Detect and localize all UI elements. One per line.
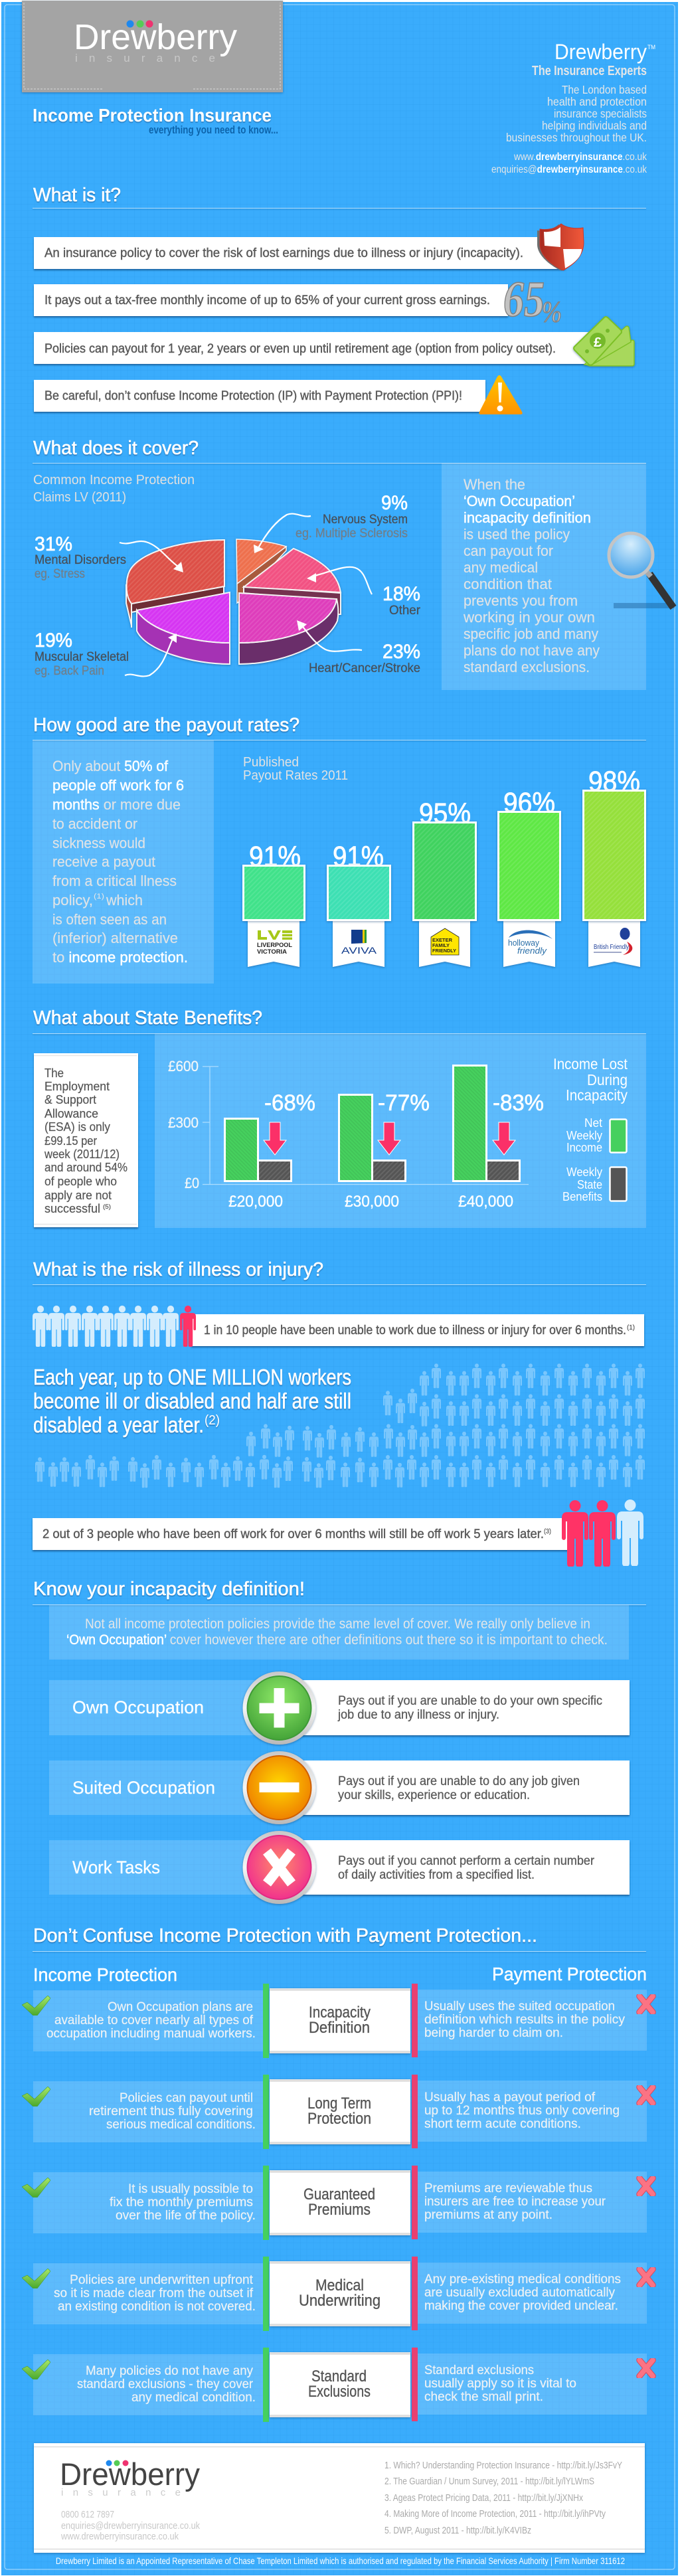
panel: own occupation note: standard exclusions. bbox=[464, 659, 590, 675]
subtitle: everything you need to know... bbox=[149, 124, 278, 136]
comparison row: medical underwriting: so it is made clear from the outset if bbox=[54, 2286, 254, 2300]
bar: Liverpool Victoria 91% bbox=[243, 841, 304, 967]
pie label: 9%: 9% bbox=[381, 492, 408, 514]
panel: own occupation note: prevents you from bbox=[464, 592, 578, 609]
bars: £20,000: £20,000 bbox=[228, 1193, 283, 1211]
logo: Holloway: holloway bbox=[508, 938, 539, 948]
slice: other 18% bbox=[244, 549, 341, 614]
pie label: 19%: Muscular Skeletal bbox=[35, 650, 129, 664]
legend: During bbox=[587, 1071, 628, 1088]
heading: state benefits: What about State Benefits? bbox=[33, 1007, 262, 1029]
icon: cross bbox=[639, 2178, 653, 2194]
footer contact details: www.drewberryinsurance.co.uk bbox=[60, 2531, 179, 2542]
fact bar 2: It pays out a tax-free monthly income of up to 65% of your current gross earnings. bbox=[44, 294, 490, 307]
fact bar: 2 out of 3 bbox=[33, 1518, 570, 1550]
pictogram: 1 in 10 people bbox=[33, 1306, 196, 1347]
bars: £30,000 bbox=[339, 1094, 405, 1211]
footer references: 1. Which? Understanding Protection Insurance - http://bit.ly/Js3FvY bbox=[384, 2460, 622, 2471]
panel: payout text: policy, bbox=[52, 892, 93, 908]
card: ESA note: & Support bbox=[44, 1093, 96, 1106]
definition: work tasks: of daily activities from a specified list. bbox=[338, 1868, 535, 1882]
panel: payout text: people off work for 6 bbox=[52, 777, 184, 794]
icon: cross bbox=[639, 2087, 653, 2103]
panel: own occupation note: ‘Own Occupation’ bbox=[464, 493, 575, 509]
card: ESA note: and around 54% bbox=[44, 1161, 128, 1174]
heading: comparison: Don’t Confuse Income Protection with Payment Protection... bbox=[33, 1925, 537, 1946]
comparison row: long term protection: Usually has a payout period of bbox=[424, 2090, 596, 2104]
comparison row: incapacity definition bbox=[22, 1984, 653, 2058]
chart title: payout rates bbox=[243, 755, 348, 783]
pie label: 9%: eg. Multiple Sclerosis bbox=[296, 527, 408, 541]
footer references: 3. Ageas Protect Pricing Data, 2011 - http://bit.ly/JjXNHx bbox=[384, 2492, 583, 2504]
logo: LV: VICTORIA bbox=[257, 948, 287, 956]
definition: own occupation bbox=[49, 1672, 630, 1745]
comparison row: long term protection: retirement thus fully covering bbox=[89, 2104, 253, 2118]
icon: tick bbox=[22, 2087, 50, 2106]
panel: payout text: receive a payout bbox=[52, 853, 155, 870]
card: ESA note: week (2011/12) bbox=[44, 1148, 120, 1161]
logo: British Friendly bbox=[594, 928, 632, 955]
definition: work tasks: Pays out if you cannot perform a certain number bbox=[338, 1854, 595, 1868]
bar: Aviva 91%: 91% bbox=[333, 841, 384, 873]
footer logo: Drewberry bbox=[60, 2456, 200, 2492]
company blurb: helping individuals and bbox=[542, 119, 647, 132]
comparison row: incapacity definition: definition which results in the policy bbox=[424, 2012, 625, 2027]
slice: heart cancer stroke 23% bbox=[239, 593, 338, 664]
icon: shield bbox=[537, 224, 584, 271]
panel: payout text: to accident or bbox=[52, 816, 137, 832]
pie label: 19% bbox=[35, 630, 129, 678]
pie label: 19%: eg. Back Pain bbox=[35, 664, 104, 678]
definition: own occupation: Own Occupation bbox=[72, 1697, 204, 1717]
comparison row: guaranteed premiums bbox=[22, 2166, 653, 2240]
comparison row: incapacity definition: Definition bbox=[309, 2019, 370, 2037]
stat: one million workers: (2) bbox=[205, 1413, 220, 1428]
panel: payout text: (1) bbox=[94, 893, 104, 901]
pie label: 23% bbox=[309, 641, 420, 675]
comparison row: medical underwriting bbox=[22, 2257, 653, 2331]
comparison row: standard exclusions bbox=[22, 2348, 653, 2422]
company blurb: The London based bbox=[562, 83, 647, 96]
column heading: income protection: Income Protection bbox=[33, 1964, 177, 1985]
definition: suited occupation: Suited Occupation bbox=[72, 1778, 215, 1798]
drop: -83%: -83% bbox=[493, 1090, 544, 1116]
panel: income chart bbox=[155, 1034, 646, 1228]
panel: payout text: which bbox=[106, 892, 143, 908]
comparison row: medical underwriting: are usually excluded automatically bbox=[424, 2285, 615, 2300]
footer panel bbox=[34, 2443, 645, 2553]
panel: payout text: sickness would bbox=[52, 835, 145, 851]
fact bar: 2 out of 3: 2 out of 3 people who have been off work for over 6 months will still be off work 5 years later. bbox=[42, 1527, 544, 1541]
legend: Weekly bbox=[566, 1165, 602, 1179]
panel: own occupation note: incapacity definition bbox=[464, 509, 591, 526]
pictogram: 2 out of 3 people bbox=[562, 1500, 643, 1567]
definition: suited occupation bbox=[49, 1751, 630, 1824]
drop: -68%: -68% bbox=[264, 1090, 315, 1116]
comparison row: standard exclusions: Exclusions bbox=[308, 2383, 371, 2401]
comparison row: standard exclusions: Standard bbox=[311, 2367, 367, 2385]
fact bar 2 bbox=[34, 284, 508, 316]
icon: 65 percent: 65 bbox=[503, 272, 545, 327]
logo: LV bbox=[257, 930, 292, 956]
pie label: 9%: Nervous System bbox=[323, 513, 408, 527]
card: ESA note: successful bbox=[44, 1202, 100, 1215]
drop: -77% bbox=[378, 1090, 430, 1155]
arrow: nervous system bbox=[254, 514, 311, 553]
stat: one million workers bbox=[33, 1365, 351, 1437]
pie label: 18% bbox=[382, 583, 421, 618]
pie label: 18%: 18% bbox=[382, 583, 420, 605]
company blurb: businesses throughout the UK. bbox=[506, 131, 647, 144]
card: ESA note: apply are not bbox=[44, 1189, 112, 1202]
stat: one million workers: Each year, up to ONE MILLION workers bbox=[33, 1365, 351, 1389]
icon: tick bbox=[22, 2360, 50, 2379]
comparison row: long term protection: Long Term bbox=[307, 2095, 371, 2112]
comparison row: medical underwriting: Medical bbox=[315, 2276, 364, 2294]
icon: 65 percent: % bbox=[542, 296, 562, 328]
logo: Exeter: FAMILY bbox=[432, 944, 450, 948]
panel: own occupation note: is used the policy bbox=[464, 526, 570, 543]
chart title: payout rates: Payout Rates 2011 bbox=[243, 768, 348, 783]
chart title: payout rates: Published bbox=[243, 755, 299, 770]
comparison row: medical underwriting: an existing condition is not covered. bbox=[58, 2299, 256, 2314]
icon: banknotes bbox=[574, 317, 634, 366]
pie label: 31% bbox=[35, 533, 126, 581]
legend: Weekly bbox=[566, 1129, 602, 1142]
bars: £40,000 bbox=[453, 1065, 519, 1211]
comparison row: medical underwriting: Underwriting bbox=[299, 2292, 381, 2310]
comparison row: incapacity definition: Usually uses the suited occupation bbox=[424, 1999, 615, 2014]
definition: own occupation: job due to any illness or injury. bbox=[337, 1708, 499, 1722]
fact bar: 1 in 10 bbox=[191, 1314, 644, 1346]
comparison row: standard exclusions: Many policies do not have any bbox=[86, 2363, 253, 2378]
icon: cross bbox=[639, 2360, 653, 2376]
card: ESA note: Allowance bbox=[44, 1107, 98, 1120]
fact bar: 1 in 10: (1) bbox=[627, 1324, 635, 1331]
drop: -83% bbox=[493, 1090, 544, 1155]
company blurb: health and protection bbox=[547, 95, 647, 108]
card: ESA note: The bbox=[44, 1067, 64, 1080]
footer contact details: enquiries@drewberryinsurance.co.uk bbox=[61, 2520, 200, 2532]
comparison row: guaranteed premiums: Premiums are reviewable thus bbox=[424, 2181, 592, 2195]
panel: payout text: months or more due bbox=[52, 796, 181, 813]
company blurb: TM bbox=[647, 44, 655, 50]
panel: definition intro: ‘Own Occupation’ cover however there are other definitions out there so it is important to check. bbox=[66, 1632, 608, 1648]
bar: Holloway Friendly 96% bbox=[498, 787, 560, 967]
axis: £600 bbox=[168, 1058, 199, 1074]
axis: £300 bbox=[168, 1114, 199, 1131]
card: ESA note: £99.15 per bbox=[44, 1134, 97, 1148]
logo: Exeter: EXETER bbox=[432, 938, 452, 943]
company blurb: Drewberry bbox=[554, 40, 647, 64]
axis bbox=[168, 1058, 529, 1191]
chart title: claims: Common Income Protection bbox=[33, 473, 195, 487]
comparison row: incapacity definition: being harder to claim on. bbox=[424, 2025, 563, 2040]
title: Income Protection Insurance bbox=[33, 105, 272, 126]
panel: own occupation note: working in your own bbox=[463, 609, 595, 626]
comparison row: incapacity definition: Incapacity bbox=[309, 2004, 371, 2021]
logo: Aviva: AVIVA bbox=[341, 945, 377, 956]
icon: tick bbox=[22, 1996, 50, 2016]
bars: £20,000 bbox=[224, 1118, 291, 1211]
card: ESA note: of people who bbox=[44, 1175, 117, 1188]
comparison row: long term protection: Policies can payout until bbox=[120, 2091, 253, 2105]
bar: Liverpool Victoria 91%: 91% bbox=[249, 841, 301, 873]
legend: Income bbox=[566, 1141, 602, 1154]
fact bar 3: Policies can payout for 1 year, 2 years or even up until retirement age (option from policy outset). bbox=[44, 342, 556, 356]
logo: LV: LIVERPOOL bbox=[257, 942, 292, 949]
column heading: payment protection: Payment Protection bbox=[492, 1964, 647, 1984]
icon: cross bbox=[639, 1996, 653, 2012]
legend bbox=[553, 1055, 628, 1203]
footer contact details: 0800 612 7897 bbox=[61, 2509, 114, 2520]
pie label: 18%: Other bbox=[389, 604, 421, 618]
bar: Exeter Family Friendly 95%: 95% bbox=[419, 798, 471, 829]
fact bar 1 bbox=[34, 237, 565, 269]
comparison row: guaranteed premiums: premiums at any point. bbox=[424, 2207, 552, 2222]
logo subtitle: insurance bbox=[75, 52, 215, 64]
panel: own occupation note: When the bbox=[464, 476, 525, 493]
heading: payout rates: How good are the payout rates? bbox=[33, 715, 299, 736]
comparison row: guaranteed premiums: Guaranteed bbox=[303, 2186, 375, 2203]
bar: Exeter Family Friendly 95% bbox=[413, 798, 475, 967]
comparison row: long term protection: Protection bbox=[307, 2110, 371, 2128]
panel: payout text: from a critical llness bbox=[52, 873, 177, 889]
pie label: 19%: 19% bbox=[35, 630, 72, 651]
pie label: 31%: 31% bbox=[35, 533, 72, 555]
legend: Incapacity bbox=[566, 1086, 628, 1104]
pie label: 9% bbox=[296, 492, 408, 541]
fact bar 4 bbox=[34, 380, 485, 412]
pie label: 23%: 23% bbox=[382, 641, 420, 663]
panel: payout text: Only about 50% of bbox=[52, 758, 169, 774]
comparison row: incapacity definition: Own Occupation plans are bbox=[108, 2000, 253, 2014]
definition: work tasks: Work Tasks bbox=[72, 1857, 160, 1877]
icon: magnifying glass bbox=[609, 533, 675, 608]
logo dots bbox=[126, 20, 153, 28]
card: ESA note bbox=[34, 1053, 138, 1227]
panel: payout text: to income protection. bbox=[52, 949, 188, 966]
footer contact details bbox=[60, 2509, 200, 2542]
footer references: 5. DWP, August 2011 - http://bit.ly/K4VIBz bbox=[384, 2525, 531, 2536]
heading: What is it?: What is it? bbox=[33, 185, 121, 206]
definition: own occupation: Pays out if you are unable to do your own specific bbox=[338, 1694, 602, 1708]
comparison row: medical underwriting: Policies are underwritten upfront bbox=[70, 2273, 254, 2287]
slice: nervous system 9% bbox=[236, 539, 286, 603]
fact bar 4: Be careful, don’t confuse Income Protection (IP) with Payment Protection (PPI)! bbox=[44, 389, 462, 403]
logo wordmark: Drewberry bbox=[74, 17, 237, 57]
panel: payout text bbox=[33, 740, 214, 984]
panel: definition intro: Not all income protection policies provide the same level of cover. We really only believe in bbox=[85, 1616, 590, 1632]
definition: suited occupation: your skills, experience or education. bbox=[338, 1788, 530, 1802]
company blurb: www.drewberryinsurance.co.uk bbox=[513, 151, 647, 163]
comparison row: standard exclusions: check the small print. bbox=[424, 2389, 543, 2404]
panel: own occupation note: any medical bbox=[464, 559, 538, 576]
pie label: 31%: Mental Disorders bbox=[35, 553, 126, 567]
arrow: other bbox=[307, 567, 372, 594]
footer references bbox=[384, 2460, 622, 2536]
footer references: 2. The Guardian / Unum Survey, 2011 - http://bit.ly/lYLWmS bbox=[384, 2476, 594, 2487]
panel: own occupation note: specific job and many bbox=[464, 626, 598, 642]
comparison row: guaranteed premiums: over the life of the policy. bbox=[116, 2208, 256, 2223]
bars: £30,000: £30,000 bbox=[345, 1193, 399, 1211]
comparison row: guaranteed premiums: fix the monthly premiums bbox=[110, 2195, 253, 2209]
comparison row: guaranteed premiums: insurers are free to increase your bbox=[424, 2194, 606, 2209]
arrow: mental disorders bbox=[120, 541, 183, 572]
icon: plus button bbox=[243, 1672, 316, 1745]
slice: muscular skeletal 19% bbox=[137, 592, 230, 664]
icon: tick bbox=[22, 2178, 50, 2197]
stat: one million workers: become ill or disabled and half are still bbox=[33, 1389, 351, 1413]
bars: £40,000: £40,000 bbox=[458, 1193, 513, 1211]
bar: British Friendly 98%: 98% bbox=[588, 766, 640, 798]
panel: own occupation note bbox=[442, 463, 646, 690]
comparison row: long term protection: short term acute conditions. bbox=[424, 2116, 581, 2131]
panel: payout text: (inferior) alternative bbox=[52, 930, 178, 946]
fact bar 1: An insurance policy to cover the risk of lost earnings due to illness or injury (incapacity). bbox=[44, 246, 523, 260]
header logo panel bbox=[22, 1, 283, 92]
icon: tick bbox=[22, 2269, 50, 2288]
legend: Income Lost bbox=[553, 1055, 628, 1073]
panel: definition intro bbox=[49, 1605, 629, 1660]
comparison row: long term protection: up to 12 months thus only covering bbox=[424, 2103, 620, 2118]
logo: Aviva bbox=[341, 930, 377, 956]
comparison row: guaranteed premiums: Premiums bbox=[308, 2201, 371, 2219]
panel: payout text: is often seen as an bbox=[52, 911, 167, 928]
comparison row: medical underwriting: Any pre-existing medical conditions bbox=[424, 2272, 621, 2286]
logo: Exeter bbox=[431, 928, 459, 955]
company blurb bbox=[491, 40, 655, 175]
arrow: muscular skeletal bbox=[125, 634, 177, 676]
pictogram: crowd of workers bbox=[35, 1363, 645, 1488]
slice: mental disorders 31% bbox=[126, 540, 224, 628]
comparison row: standard exclusions: usually apply so it is vital to bbox=[424, 2376, 576, 2391]
card: ESA note: (5) bbox=[103, 1203, 111, 1210]
footer logo: insurance bbox=[61, 2487, 181, 2498]
card: ESA note: Employment bbox=[44, 1080, 110, 1093]
bar: British Friendly 98% bbox=[583, 766, 645, 967]
panel: own occupation note: can payout for bbox=[464, 543, 553, 559]
arrow: heart cancer stroke bbox=[297, 620, 362, 651]
logo: Holloway: friendly bbox=[517, 946, 548, 956]
logo: Exeter: FRIENDLY bbox=[432, 949, 456, 954]
panel: own occupation note: plans do not have any bbox=[464, 642, 600, 659]
axis: £0 bbox=[185, 1175, 199, 1191]
logo: British Friendly: British Friendly bbox=[594, 943, 630, 951]
fact bar 3 bbox=[34, 332, 589, 364]
pie chart bbox=[126, 539, 341, 664]
chart title: claims bbox=[33, 473, 195, 505]
drop: -68% bbox=[264, 1090, 315, 1155]
legend: Benefits bbox=[562, 1190, 602, 1203]
pie label: 23%: Heart/Cancer/Stroke bbox=[309, 661, 420, 675]
footer references: 4. Making More of Income Protection, 2011 - http://bit.ly/ihPVty bbox=[384, 2508, 606, 2520]
icon: minus button bbox=[243, 1751, 316, 1824]
logo: Holloway bbox=[508, 930, 552, 956]
comparison row: standard exclusions: any medical condition. bbox=[131, 2390, 256, 2405]
company blurb: insurance specialists bbox=[554, 107, 647, 120]
panel: own occupation note: condition that bbox=[464, 576, 552, 592]
legend: Net bbox=[584, 1116, 602, 1130]
comparison row: incapacity definition: available to cover nearly all types of bbox=[54, 2013, 254, 2027]
comparison row: standard exclusions: Standard exclusions bbox=[424, 2363, 534, 2377]
legend: State bbox=[577, 1178, 602, 1191]
bar: Holloway Friendly 96%: 96% bbox=[503, 787, 555, 819]
definition: suited occupation: Pays out if you are unable to do any job given bbox=[338, 1774, 580, 1788]
heading: What does it cover?: What does it cover? bbox=[33, 438, 199, 459]
company blurb: The Insurance Experts bbox=[532, 64, 647, 78]
heading: incapacity definition: Know your incapacity definition! bbox=[33, 1579, 305, 1600]
bar: Aviva 91% bbox=[328, 841, 390, 967]
pie label: 31%: eg. Stress bbox=[35, 567, 85, 581]
stat: one million workers: disabled a year later. bbox=[33, 1413, 204, 1437]
icon: banknotes: £ bbox=[594, 335, 602, 350]
drop: -77%: -77% bbox=[378, 1090, 430, 1116]
comparison row: standard exclusions: standard exclusions - they cover bbox=[77, 2377, 253, 2391]
card: ESA note: (ESA) is only bbox=[44, 1120, 110, 1134]
company blurb: enquiries@drewberryinsurance.co.uk bbox=[491, 164, 647, 175]
definition: work tasks bbox=[49, 1831, 630, 1904]
chart title: claims: Claims LV (2011) bbox=[33, 490, 126, 505]
comparison row: long term protection bbox=[22, 2075, 653, 2149]
fact bar: 2 out of 3: (3) bbox=[544, 1528, 551, 1535]
icon: cross bbox=[639, 2269, 653, 2285]
comparison row: guaranteed premiums: It is usually possible to bbox=[128, 2182, 253, 2196]
icon: cross button bbox=[243, 1831, 316, 1904]
comparison row: long term protection: serious medical conditions. bbox=[106, 2117, 256, 2132]
icon: warning triangle bbox=[479, 375, 523, 414]
heading: risk: What is the risk of illness or injury? bbox=[33, 1259, 323, 1280]
comparison row: medical underwriting: making the cover provided unclear. bbox=[424, 2298, 618, 2313]
comparison row: incapacity definition: occupation including manual workers. bbox=[46, 2026, 256, 2041]
fact bar: 1 in 10: 1 in 10 people have been unable to work due to illness or injury for over 6 months. bbox=[204, 1324, 626, 1337]
